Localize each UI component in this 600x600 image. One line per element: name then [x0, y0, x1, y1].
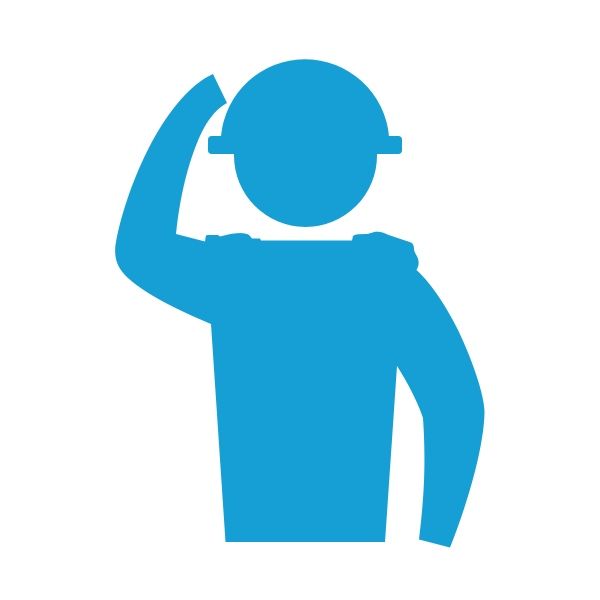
helmet dome	[221, 59, 389, 137]
helmet brim	[208, 136, 402, 154]
icon: helmet and head	[208, 59, 402, 227]
icon: body with raised arm and hanging arm	[115, 74, 485, 548]
face	[234, 150, 377, 227]
